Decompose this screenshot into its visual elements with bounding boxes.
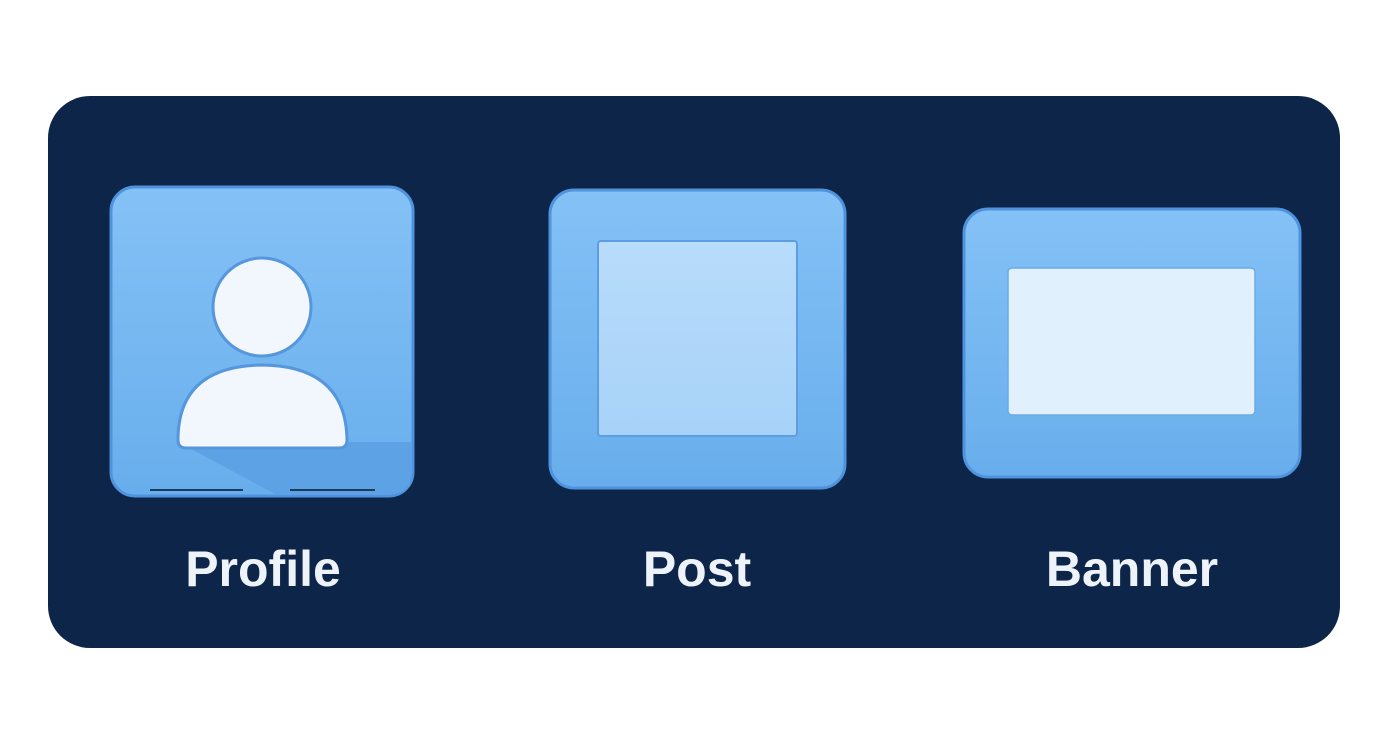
tile: banner (964, 209, 1300, 477)
tile: profile (111, 187, 413, 496)
label: Post: Post (643, 541, 752, 597)
inner square (598, 241, 797, 436)
panel: dark background (48, 96, 1340, 648)
inner rectangle (1008, 268, 1255, 415)
label: Banner: Banner (1046, 541, 1218, 597)
icon: person body (178, 365, 347, 448)
label: Profile: Profile (185, 541, 341, 597)
tile: post (550, 190, 845, 488)
icon: person head (213, 258, 311, 356)
